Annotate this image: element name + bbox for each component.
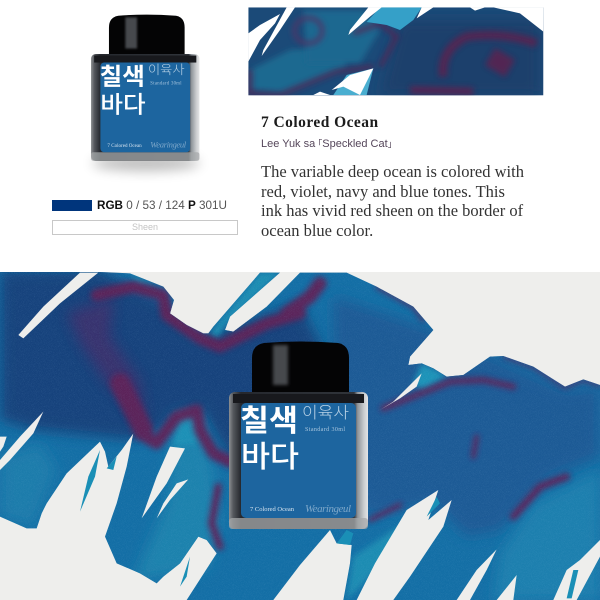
heading: ink name: 7 Colored Ocean [261,114,379,131]
paper background [0,272,600,600]
ink wash strokes [0,270,600,600]
magenta sheen [66,300,148,410]
icon: small ink bottle: 칠색 [100,57,145,91]
bottle label [241,403,356,518]
bottle label text: 칠색 [240,396,298,440]
colour values: RGB 0 / 53 / 124 P 301U [97,199,227,212]
icon: small ink bottle: 바다 [100,85,146,119]
bottle glass [229,392,368,529]
bottle cap [252,342,349,392]
icon: small ink bottle: 7 Colored Ocean [107,143,142,149]
paper-white scratches [0,273,600,600]
text block: description: red, violet, navy and blue tones. This [261,182,505,201]
text block: description: The variable deep ocean is colored with [261,162,524,181]
bottle label text: 7 Colored Ocean [250,506,295,513]
bottle label text: Standard 30ml [305,427,345,433]
icon: small ink bottle: Wearingeul [150,140,187,150]
icon: small ink bottle [91,15,199,161]
teal drips on paper [80,450,578,598]
bottle label text: 이육사 [302,399,349,423]
text block: description [261,162,524,240]
ink swatch banner [248,7,543,95]
subtitle: poet and poem: Lee Yuk sa「Speckled Cat」 [261,138,397,150]
colour swatch [52,200,92,211]
text block: description: ink has vivid red sheen on the border of [261,201,523,220]
icon: small bottle shadow [92,155,200,171]
bottle label text [240,396,351,515]
bottle label text: 바다 [241,432,299,476]
sheen box [52,220,238,235]
text block: description: ocean blue color. [261,221,373,240]
bottle label text: Wearingeul [305,503,351,515]
sheen box: Sheen [132,222,158,232]
icon: small ink bottle: Standard 30ml [150,81,182,86]
icon: large ink bottle [229,342,368,529]
icon: small ink bottle: 이육사 [148,60,185,78]
